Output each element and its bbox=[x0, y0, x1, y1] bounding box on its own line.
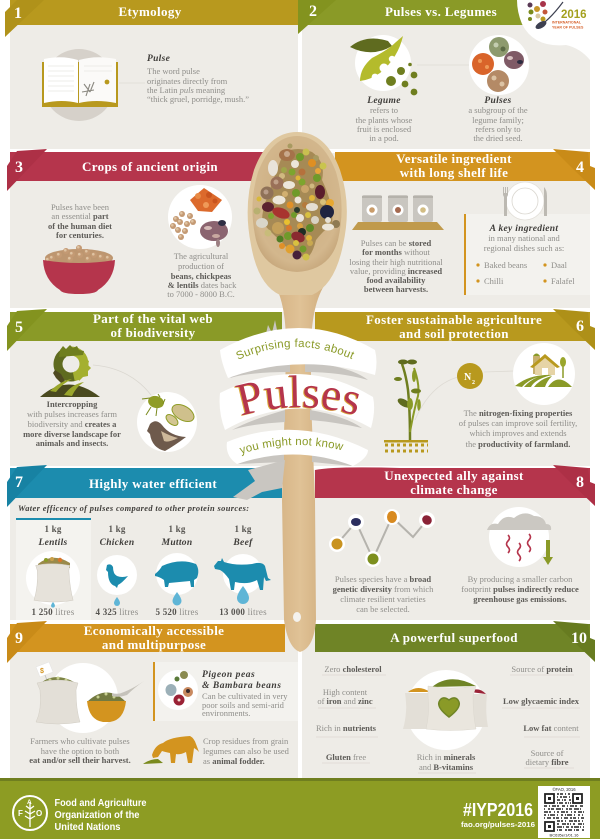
column beef: 13 000 litres bbox=[219, 607, 267, 617]
legume text bbox=[356, 96, 413, 143]
panel 4: versatile ingredient: with long shelf life bbox=[400, 165, 508, 180]
panel 9: economically accessible bbox=[7, 621, 298, 766]
pulses text bbox=[468, 96, 528, 143]
number 10: 10 bbox=[571, 630, 587, 647]
text: part of diet: of the human diet bbox=[48, 221, 112, 231]
column mutton: 5 520 litres bbox=[156, 607, 199, 617]
icon: farm on hill bbox=[513, 343, 575, 405]
panel 3: crops of ancient origin bbox=[7, 149, 265, 299]
text: nitrogen fixing: of pulses can improve soil fertility, bbox=[459, 418, 577, 428]
panel 6: sustainable agriculture: and soil protection bbox=[399, 326, 509, 341]
heading 6: Foster sustainable agriculture bbox=[366, 312, 542, 327]
text: left benefits: High content bbox=[323, 687, 368, 697]
banner fold 7 bbox=[7, 465, 47, 507]
icon: carbon footprint cloud bbox=[487, 507, 553, 567]
text: part of diet bbox=[48, 202, 112, 240]
box: key ingredient: Falafel bbox=[551, 276, 575, 286]
FAO logo: O bbox=[36, 809, 42, 818]
box: key ingredient: regional dishes such as: bbox=[484, 243, 564, 253]
connector curve bbox=[93, 365, 151, 395]
box: key ingredient: in many national and bbox=[488, 233, 561, 243]
text: genetic diversity: genetic diversity from which bbox=[333, 584, 434, 594]
text: minerals bbox=[417, 752, 476, 773]
pulse definition: Pulse bbox=[147, 54, 171, 64]
panel 8: climate change: climate change bbox=[410, 482, 498, 497]
icon: plant and soil bbox=[384, 360, 514, 451]
icon: circle of lentils beans chickpeas bbox=[168, 185, 232, 249]
column chicken: Chicken bbox=[100, 538, 134, 548]
text: animal fodder: as animal fodder. bbox=[203, 756, 265, 766]
icon: intercropping wheel and hill bbox=[40, 345, 100, 397]
column beef: Beef bbox=[232, 538, 253, 548]
text: intercropping: with pulses increases farm bbox=[27, 409, 117, 419]
FAO name: Food and Agriculture bbox=[54, 797, 147, 809]
column mutton: 1 kg bbox=[168, 524, 186, 534]
text: left benefits bbox=[316, 664, 386, 763]
pulses text: legume family; bbox=[472, 115, 524, 125]
text: agricultural production: The agricultural bbox=[174, 251, 229, 261]
column chicken bbox=[96, 524, 139, 617]
pulse definition: The word pulse bbox=[147, 66, 200, 76]
banner 10 bbox=[315, 624, 590, 652]
pulses text: a subgroup of the bbox=[468, 105, 528, 115]
text: storage bbox=[349, 238, 443, 294]
box: pigeon peas: Pigeon peas bbox=[202, 670, 255, 680]
column lentils: Lentils bbox=[37, 538, 68, 548]
legume text: refers to bbox=[370, 105, 398, 115]
box: key ingredient: Baked beans bbox=[484, 260, 527, 270]
text: part of diet: Pulses have been bbox=[51, 202, 110, 212]
column lentils: 1 kg bbox=[44, 524, 62, 534]
banner 6 bbox=[315, 312, 590, 341]
banner 9 bbox=[10, 624, 285, 652]
banner fold 10 bbox=[553, 621, 595, 662]
spoon bowl bbox=[248, 132, 347, 295]
number 7: 7 bbox=[15, 474, 23, 491]
banner fold 1 bbox=[5, 0, 44, 37]
icon: nitrogen bbox=[457, 363, 483, 389]
text: nitrogen fixing: which improves and extends bbox=[469, 428, 567, 438]
url: fao.org/pulses-2016 bbox=[461, 820, 535, 829]
panel 6: sustainable agriculture bbox=[315, 309, 595, 451]
text: right benefits: dietary fibre bbox=[525, 757, 569, 767]
column lentils: 1 250 litres bbox=[32, 607, 75, 617]
spoon handle bbox=[272, 280, 328, 652]
text: left benefits: Gluten free bbox=[326, 752, 366, 762]
title: Pulses: Pulses bbox=[235, 375, 359, 416]
number 1: 1 bbox=[14, 5, 22, 22]
text: intercropping: Intercropping bbox=[47, 399, 98, 409]
ribbon bottom bbox=[227, 430, 368, 466]
banner 7 bbox=[10, 468, 282, 498]
text: nitrogen fixing: The nitrogen-fixing properties bbox=[464, 408, 573, 418]
text: agricultural production: & lentils dates back bbox=[168, 280, 237, 290]
text: eat or sell: Farmers who cultivate pulses bbox=[30, 736, 130, 746]
banner 5 bbox=[10, 312, 282, 341]
box: pigeon peas: poor soils and semi-arid bbox=[202, 700, 285, 710]
text: intercropping bbox=[23, 399, 121, 448]
pulses in the spoon bbox=[254, 144, 340, 260]
pulse definition: originates directly from bbox=[147, 76, 228, 86]
title ribbons bbox=[220, 320, 376, 500]
text: part of diet: an essential part bbox=[51, 211, 109, 221]
text: animal fodder: legumes can also be used bbox=[203, 746, 290, 756]
text: storage: Pulses can be stored bbox=[361, 238, 431, 248]
text: carbon footprint: By producing a smaller carbon bbox=[468, 574, 573, 584]
number 5: 5 bbox=[15, 319, 23, 336]
icon: sack and bowl: $ bbox=[40, 668, 44, 675]
text: nitrogen fixing: the productivity of farmland. bbox=[466, 439, 570, 449]
FAO name: United Nations bbox=[54, 821, 121, 833]
logo: international year of pulses: YEAR OF PULSES bbox=[552, 26, 584, 30]
text: left benefits: of iron and zinc bbox=[317, 696, 373, 706]
pulses text: the dried seed. bbox=[473, 133, 523, 143]
pulses text: Pulses bbox=[484, 96, 512, 106]
FAO name bbox=[54, 797, 147, 833]
text: carbon footprint: greenhouse gas emissions. bbox=[473, 594, 567, 604]
legume text: fruit is enclosed bbox=[357, 124, 412, 134]
pulse definition: the Latin puls meaning bbox=[147, 85, 226, 95]
column beef: 1 kg bbox=[234, 524, 252, 534]
panel 7: water efficiency bbox=[7, 465, 282, 620]
banner fold 3 bbox=[7, 149, 47, 191]
text: genetic diversity bbox=[333, 574, 434, 614]
heading 10: A powerful superfood bbox=[390, 630, 518, 645]
icon: bug beans bird bbox=[137, 392, 197, 452]
panel 9: economically accessible: and multipurpose bbox=[102, 637, 206, 652]
handle hole bbox=[293, 612, 301, 622]
number 2: 2 bbox=[309, 3, 317, 20]
text: storage: food availability bbox=[367, 275, 426, 285]
banner fold 6 bbox=[553, 309, 595, 350]
column mutton bbox=[155, 524, 199, 617]
FAO logo: F bbox=[18, 809, 23, 818]
QR code: BC635e/1/01.16 bbox=[550, 832, 579, 838]
banner fold 5 bbox=[7, 309, 47, 351]
heading 7: Highly water efficient bbox=[89, 476, 217, 491]
ribbon tails bbox=[233, 320, 285, 500]
text: surprising facts about: Surprising facts about bbox=[236, 338, 354, 360]
text: agricultural production: to 7000 - 8000 B.C. bbox=[167, 289, 235, 299]
icon: sack and bowl bbox=[36, 662, 144, 733]
ribbon middle bbox=[220, 374, 374, 430]
text: you might not know: you might not know bbox=[239, 437, 344, 456]
subtitle water: Water efficency of pulses compared to other protein sources: bbox=[18, 504, 249, 513]
banner fold 4 bbox=[553, 149, 595, 190]
column chicken: 1 kg bbox=[108, 524, 126, 534]
panel 4: versatile ingredient bbox=[335, 149, 595, 295]
ribbon shadows bbox=[230, 362, 368, 466]
text: storage: losing their high nutritional bbox=[349, 257, 443, 267]
text: right benefits: Source of bbox=[531, 748, 564, 758]
text: eat or sell bbox=[29, 736, 131, 765]
heading 4: Versatile ingredient bbox=[396, 151, 512, 166]
text: intercropping: more diverse landscape for bbox=[23, 429, 121, 439]
panel 5: biodiversity: of biodiversity bbox=[110, 325, 196, 340]
icon: jars on shelf bbox=[352, 195, 444, 230]
banner 8 bbox=[315, 467, 590, 498]
box: key ingredient: Chilli bbox=[484, 276, 504, 286]
text: right benefits: Low fat content bbox=[523, 723, 579, 733]
column lentils bbox=[16, 518, 91, 620]
panel 10: superfood bbox=[315, 621, 595, 773]
box: pigeon peas: & Bambara beans bbox=[202, 681, 282, 691]
text: animal fodder bbox=[203, 736, 290, 766]
icon: nitrogen: 2 bbox=[472, 380, 475, 386]
text: carbon footprint: footprint pulses indirectly reduce bbox=[461, 584, 579, 594]
legume text: in a pod. bbox=[369, 133, 399, 143]
box: pigeon peas: environments. bbox=[202, 708, 250, 718]
pulse definition bbox=[147, 54, 249, 104]
number 8: 8 bbox=[576, 474, 584, 491]
heading 1: Etymology bbox=[118, 4, 182, 19]
QR code: ©FAO, 2016 bbox=[552, 787, 576, 792]
text: left benefits: Rich in nutrients bbox=[316, 723, 377, 733]
box: pigeon peas bbox=[153, 662, 298, 721]
footer bbox=[0, 778, 600, 839]
icon: open book bbox=[42, 49, 145, 121]
box: key ingredient: A key ingredient bbox=[489, 224, 558, 234]
FAO logo: A bbox=[27, 799, 32, 806]
number 3: 3 bbox=[15, 159, 23, 176]
column chicken: 4 325 litres bbox=[96, 607, 139, 617]
banner 1 bbox=[10, 0, 298, 25]
text: minerals: Rich in minerals bbox=[417, 752, 476, 762]
text: carbon footprint bbox=[461, 574, 579, 604]
text: storage: for months without bbox=[362, 247, 431, 257]
number 6: 6 bbox=[576, 318, 584, 335]
column beef bbox=[214, 524, 271, 617]
panel 5: biodiversity bbox=[7, 309, 282, 452]
QR code bbox=[538, 786, 590, 838]
text: animal fodder: Crop residues from grain bbox=[203, 736, 289, 746]
banner 3 bbox=[10, 152, 265, 181]
text: agricultural production: beans, chickpeas bbox=[171, 271, 232, 281]
heading 3: Crops of ancient origin bbox=[82, 159, 218, 174]
title shadow: Pulses: Pulses bbox=[234, 376, 357, 416]
banner 4 bbox=[335, 152, 590, 181]
box: key ingredient: Daal bbox=[551, 260, 568, 270]
text: agricultural production bbox=[167, 251, 237, 299]
banner 2 bbox=[302, 0, 532, 25]
icon: pulses mix bbox=[469, 35, 529, 95]
box: key ingredient bbox=[464, 182, 590, 295]
heading 9: Economically accessible bbox=[84, 623, 224, 638]
panel 8: climate change bbox=[315, 465, 595, 614]
panel 1: etymology bbox=[5, 0, 298, 121]
text: eat or sell: have the option to both bbox=[41, 746, 120, 756]
text: nitrogen fixing bbox=[459, 408, 577, 449]
number 4: 4 bbox=[576, 159, 584, 176]
text: minerals: and B-vitamins bbox=[419, 762, 474, 772]
text: genetic diversity: Pulses species have a broad bbox=[335, 574, 431, 584]
text: part of diet: for centuries. bbox=[56, 230, 104, 240]
icon: genetic diversity network bbox=[329, 509, 435, 567]
text: left benefits: Zero cholesterol bbox=[324, 664, 382, 674]
icon: legume pod bbox=[350, 35, 470, 95]
banner fold 9 bbox=[7, 621, 47, 663]
panel 2: pulses vs legumes bbox=[298, 0, 600, 143]
heading 2: Pulses vs. Legumes bbox=[385, 4, 497, 19]
text: intercropping: animals and insects. bbox=[36, 438, 108, 448]
text: storage: value, providing increased bbox=[350, 266, 442, 276]
text: intercropping: biodiversity and creates a bbox=[28, 419, 117, 429]
heading 5: Part of the vital web bbox=[93, 311, 213, 326]
legume text: the plants whose bbox=[356, 115, 413, 125]
icon: bowl of chickpeas bbox=[43, 245, 115, 294]
curve paths for text bbox=[238, 347, 362, 364]
text: right benefits: Low glycaemic index bbox=[503, 696, 580, 706]
pulse definition: “thick gruel, porridge, mush.” bbox=[147, 94, 249, 104]
number 9: 9 bbox=[15, 630, 23, 647]
legume text: Legume bbox=[366, 96, 401, 106]
banner fold 8 bbox=[553, 465, 595, 506]
hashtag: #IYP2016 bbox=[463, 799, 533, 820]
banner fold 2 bbox=[298, 0, 336, 34]
footer bar bbox=[0, 778, 600, 839]
FAO name: Organization of the bbox=[54, 809, 140, 821]
text: storage: between harvests. bbox=[364, 284, 428, 294]
pulses text: refers only to bbox=[475, 124, 521, 134]
ribbon top bbox=[220, 328, 376, 378]
text: right benefits: Source of protein bbox=[511, 664, 573, 674]
text: right benefits bbox=[502, 664, 580, 768]
logo: international year of pulses: 2016 bbox=[561, 9, 587, 21]
text: eat or sell: eat and/or sell their harvest. bbox=[29, 755, 131, 765]
icon: sacks with heart bbox=[403, 670, 488, 750]
heading 8: Unexpected ally against bbox=[384, 468, 524, 483]
text: agricultural production: production of bbox=[178, 261, 224, 271]
text: genetic diversity: climate resilient varieties bbox=[340, 594, 426, 604]
box: pigeon peas: Can be cultivated in very bbox=[202, 691, 288, 701]
icon: nitrogen: N bbox=[464, 372, 472, 383]
column mutton: Mutton bbox=[161, 538, 192, 548]
FAO logo bbox=[13, 796, 47, 830]
spoon bbox=[248, 132, 347, 652]
text: genetic diversity: can be selected. bbox=[356, 604, 410, 614]
logo: international year of pulses bbox=[517, 0, 600, 70]
icon: grazing cow bbox=[143, 736, 199, 764]
logo: international year of pulses: INTERNATIONAL bbox=[552, 20, 582, 24]
